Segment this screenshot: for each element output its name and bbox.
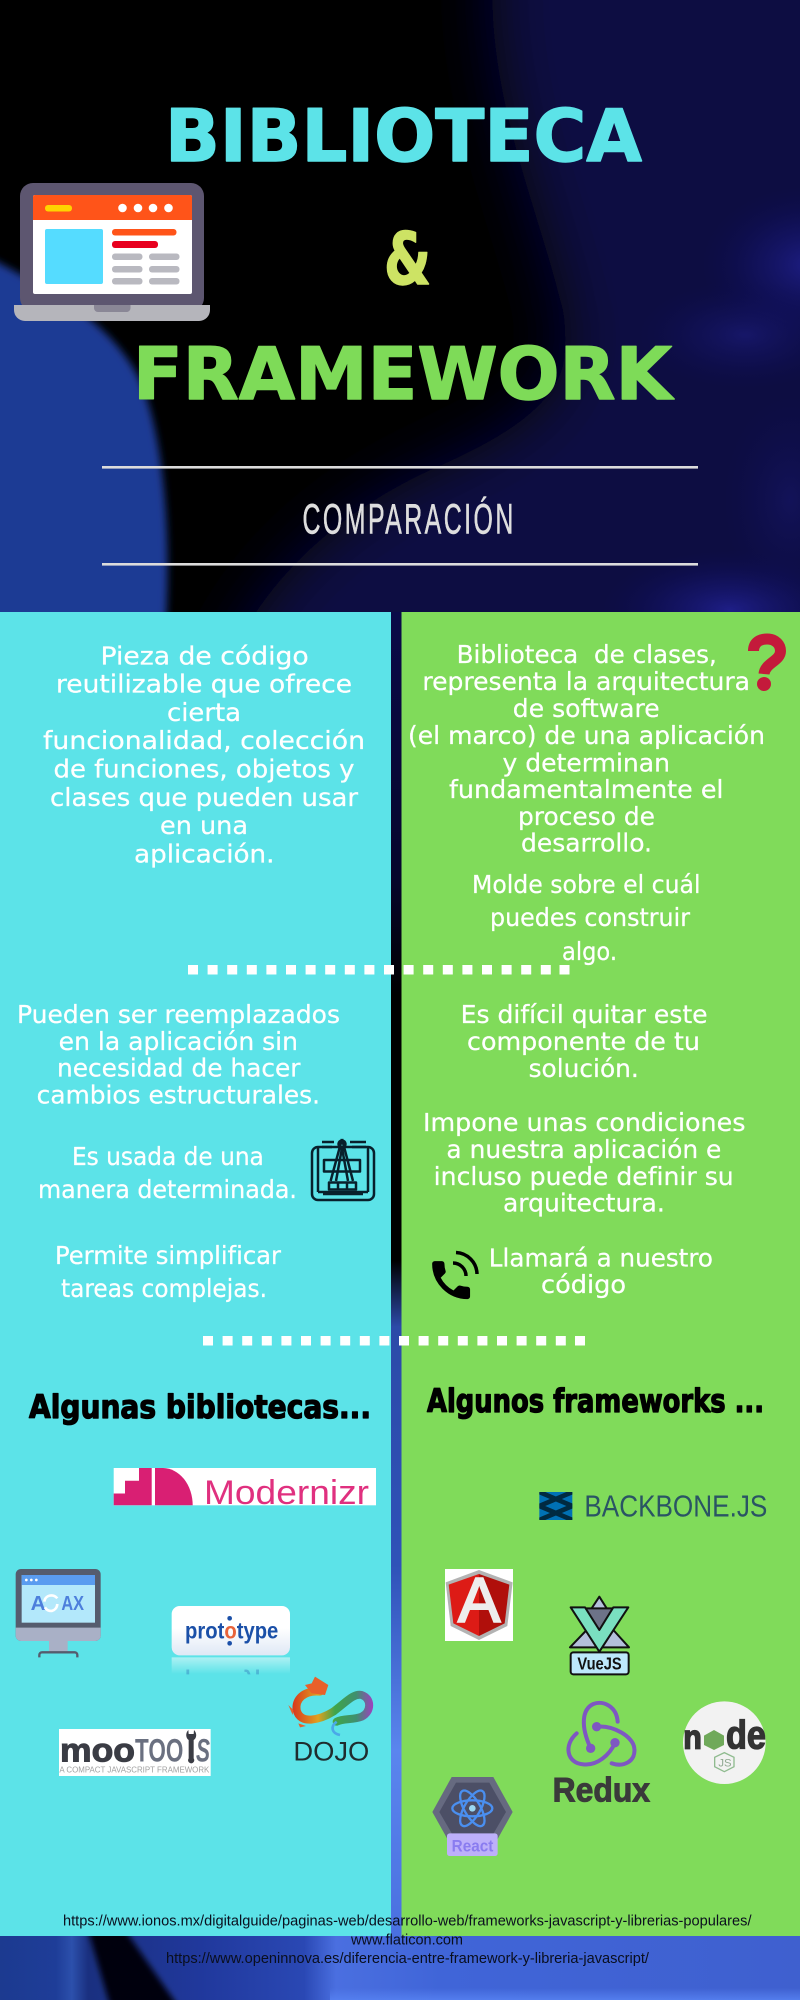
- text: framework definition: [408, 640, 765, 966]
- footer: source links: [63, 1913, 752, 1967]
- icon: blueprint with compass: [312, 1139, 374, 1200]
- logo: Backbone.js: BACKBONE.JS: [584, 1490, 767, 1524]
- text: framework definition: algo.: [562, 937, 617, 966]
- logo: MooTools: A COMPACT JAVASCRIPT FRAMEWORK: [59, 1765, 210, 1775]
- text: framework characteristics: componente de tu: [467, 1027, 700, 1056]
- text: biblioteca definition: aplicación.: [134, 840, 274, 868]
- text: biblioteca characteristics: necesidad de hacer: [57, 1054, 301, 1083]
- text: framework definition: puedes construir: [490, 903, 691, 932]
- subtitle: comparación with rules: COMPARACIÓN: [302, 496, 516, 543]
- footer: source links: https://www.ionos.mx/digitalguide/paginas-web/desarrollo-web/frameworks-javascript-y-librerias-populares/: [63, 1913, 752, 1930]
- text: framework definition: (el marco) de una aplicación: [408, 721, 765, 750]
- text: framework definition: y determinan: [502, 748, 670, 777]
- logo: React: React: [452, 1837, 494, 1856]
- text: biblioteca characteristics: Permite simplificar: [55, 1241, 282, 1270]
- text: biblioteca characteristics: Es usada de una: [72, 1142, 264, 1171]
- logo: Modernizr: [114, 1468, 376, 1512]
- text: framework definition: fundamentalmente el: [449, 775, 724, 804]
- logo: Ajax monitor: AX: [61, 1592, 84, 1615]
- text: framework definition: desarrollo.: [521, 829, 652, 858]
- logo: MooTools: moo: [60, 1733, 135, 1770]
- text: framework definition: de software: [513, 694, 660, 723]
- text: biblioteca definition: reutilizable que ofrece: [56, 670, 352, 699]
- text: framework characteristics: solución.: [529, 1054, 639, 1083]
- logo: Ajax monitor: [16, 1569, 101, 1657]
- logo: MooTools: [59, 1729, 211, 1776]
- logo: VueJS: [570, 1597, 629, 1674]
- text: biblioteca characteristics: [17, 1000, 340, 1303]
- logo: MooTools: TOO: [135, 1733, 183, 1769]
- icon: red question mark: [754, 639, 780, 691]
- logo: Prototype: [172, 1606, 290, 1674]
- text: biblioteca definition: Pieza de código: [100, 641, 309, 670]
- logo: Ajax monitor: A: [31, 1592, 46, 1615]
- text: framework definition: proceso de: [518, 802, 655, 831]
- logo: Redux: Redux: [553, 1772, 651, 1810]
- footer: source links: www.flaticon.com: [350, 1931, 463, 1948]
- text: biblioteca characteristics: en la aplicación sin: [59, 1027, 298, 1056]
- text: framework characteristics: a nuestra aplicación e: [446, 1135, 721, 1164]
- logo: MooTools: S: [196, 1733, 210, 1769]
- text: framework definition: Molde sobre el cuál: [472, 870, 700, 899]
- title: BIBLIOTECA: BIBLIOTECA: [165, 94, 642, 178]
- text: biblioteca characteristics: Pueden ser reemplazados: [17, 1000, 340, 1029]
- text: biblioteca characteristics: cambios estructurales.: [37, 1081, 320, 1110]
- logo: Angular: [445, 1566, 513, 1641]
- logo: VueJS: VueJS: [577, 1653, 622, 1673]
- divider: second dotted row: [203, 1336, 585, 1346]
- logo: Node.js: JS: [718, 1758, 732, 1770]
- title: FRAMEWORK: FRAMEWORK: [133, 332, 674, 416]
- logo: Redux: [553, 1703, 651, 1810]
- logo: Node.js: n: [683, 1719, 702, 1756]
- logo: Prototype: prototype: [185, 1617, 278, 1643]
- logo: Angular: A: [458, 1566, 501, 1636]
- panel: framework column background: [402, 612, 800, 1936]
- text: biblioteca definition: de funciones, objetos y: [54, 754, 354, 784]
- logo: Dojo: DOJO: [293, 1737, 369, 1767]
- text: biblioteca definition: cierta: [167, 698, 241, 727]
- logo: React: [432, 1777, 513, 1856]
- logo: Modernizr: Modernizr: [204, 1474, 369, 1512]
- logo: Backbone.js: [539, 1492, 766, 1520]
- heading: algunas bibliotecas: Algunas bibliotecas...: [29, 1388, 371, 1426]
- text: framework definition: Biblioteca de clases,: [457, 640, 717, 669]
- text: biblioteca definition: clases que pueden usar: [50, 783, 359, 812]
- logo: Node.js: [683, 1701, 766, 1784]
- text: framework characteristics: Impone unas condiciones: [423, 1108, 745, 1137]
- text: framework characteristics: código: [541, 1270, 626, 1299]
- logo: Node.js: de: [726, 1713, 766, 1757]
- title block: [133, 94, 674, 416]
- text: framework characteristics: Es difícil quitar este: [461, 1000, 708, 1029]
- logo: Prototype: prototype: [185, 1669, 278, 1695]
- text: framework characteristics: incluso puede definir su: [434, 1162, 734, 1191]
- title: ampersand: &: [384, 217, 431, 301]
- text: biblioteca definition: [43, 641, 365, 868]
- icon: laptop: [14, 183, 210, 321]
- icon: phone: [433, 1252, 477, 1299]
- text: framework characteristics: [423, 1000, 745, 1299]
- text: framework characteristics: arquitectura.: [503, 1189, 665, 1218]
- text: biblioteca characteristics: tareas complejas.: [61, 1274, 267, 1303]
- panel: biblioteca column background: [0, 612, 391, 1936]
- text: framework definition: representa la arquitectura: [422, 667, 750, 696]
- text: biblioteca characteristics: manera determinada.: [38, 1175, 297, 1204]
- logo: Dojo: [288, 1677, 369, 1767]
- text: biblioteca definition: en una: [160, 811, 248, 840]
- text: biblioteca definition: funcionalidad, colección: [43, 726, 365, 755]
- divider: first dotted row: [188, 965, 570, 974]
- footer: source links: https://www.openinnova.es/diferencia-entre-framework-y-libreria-javascript/: [166, 1950, 650, 1967]
- text: framework characteristics: Llamará a nuestro: [489, 1244, 713, 1272]
